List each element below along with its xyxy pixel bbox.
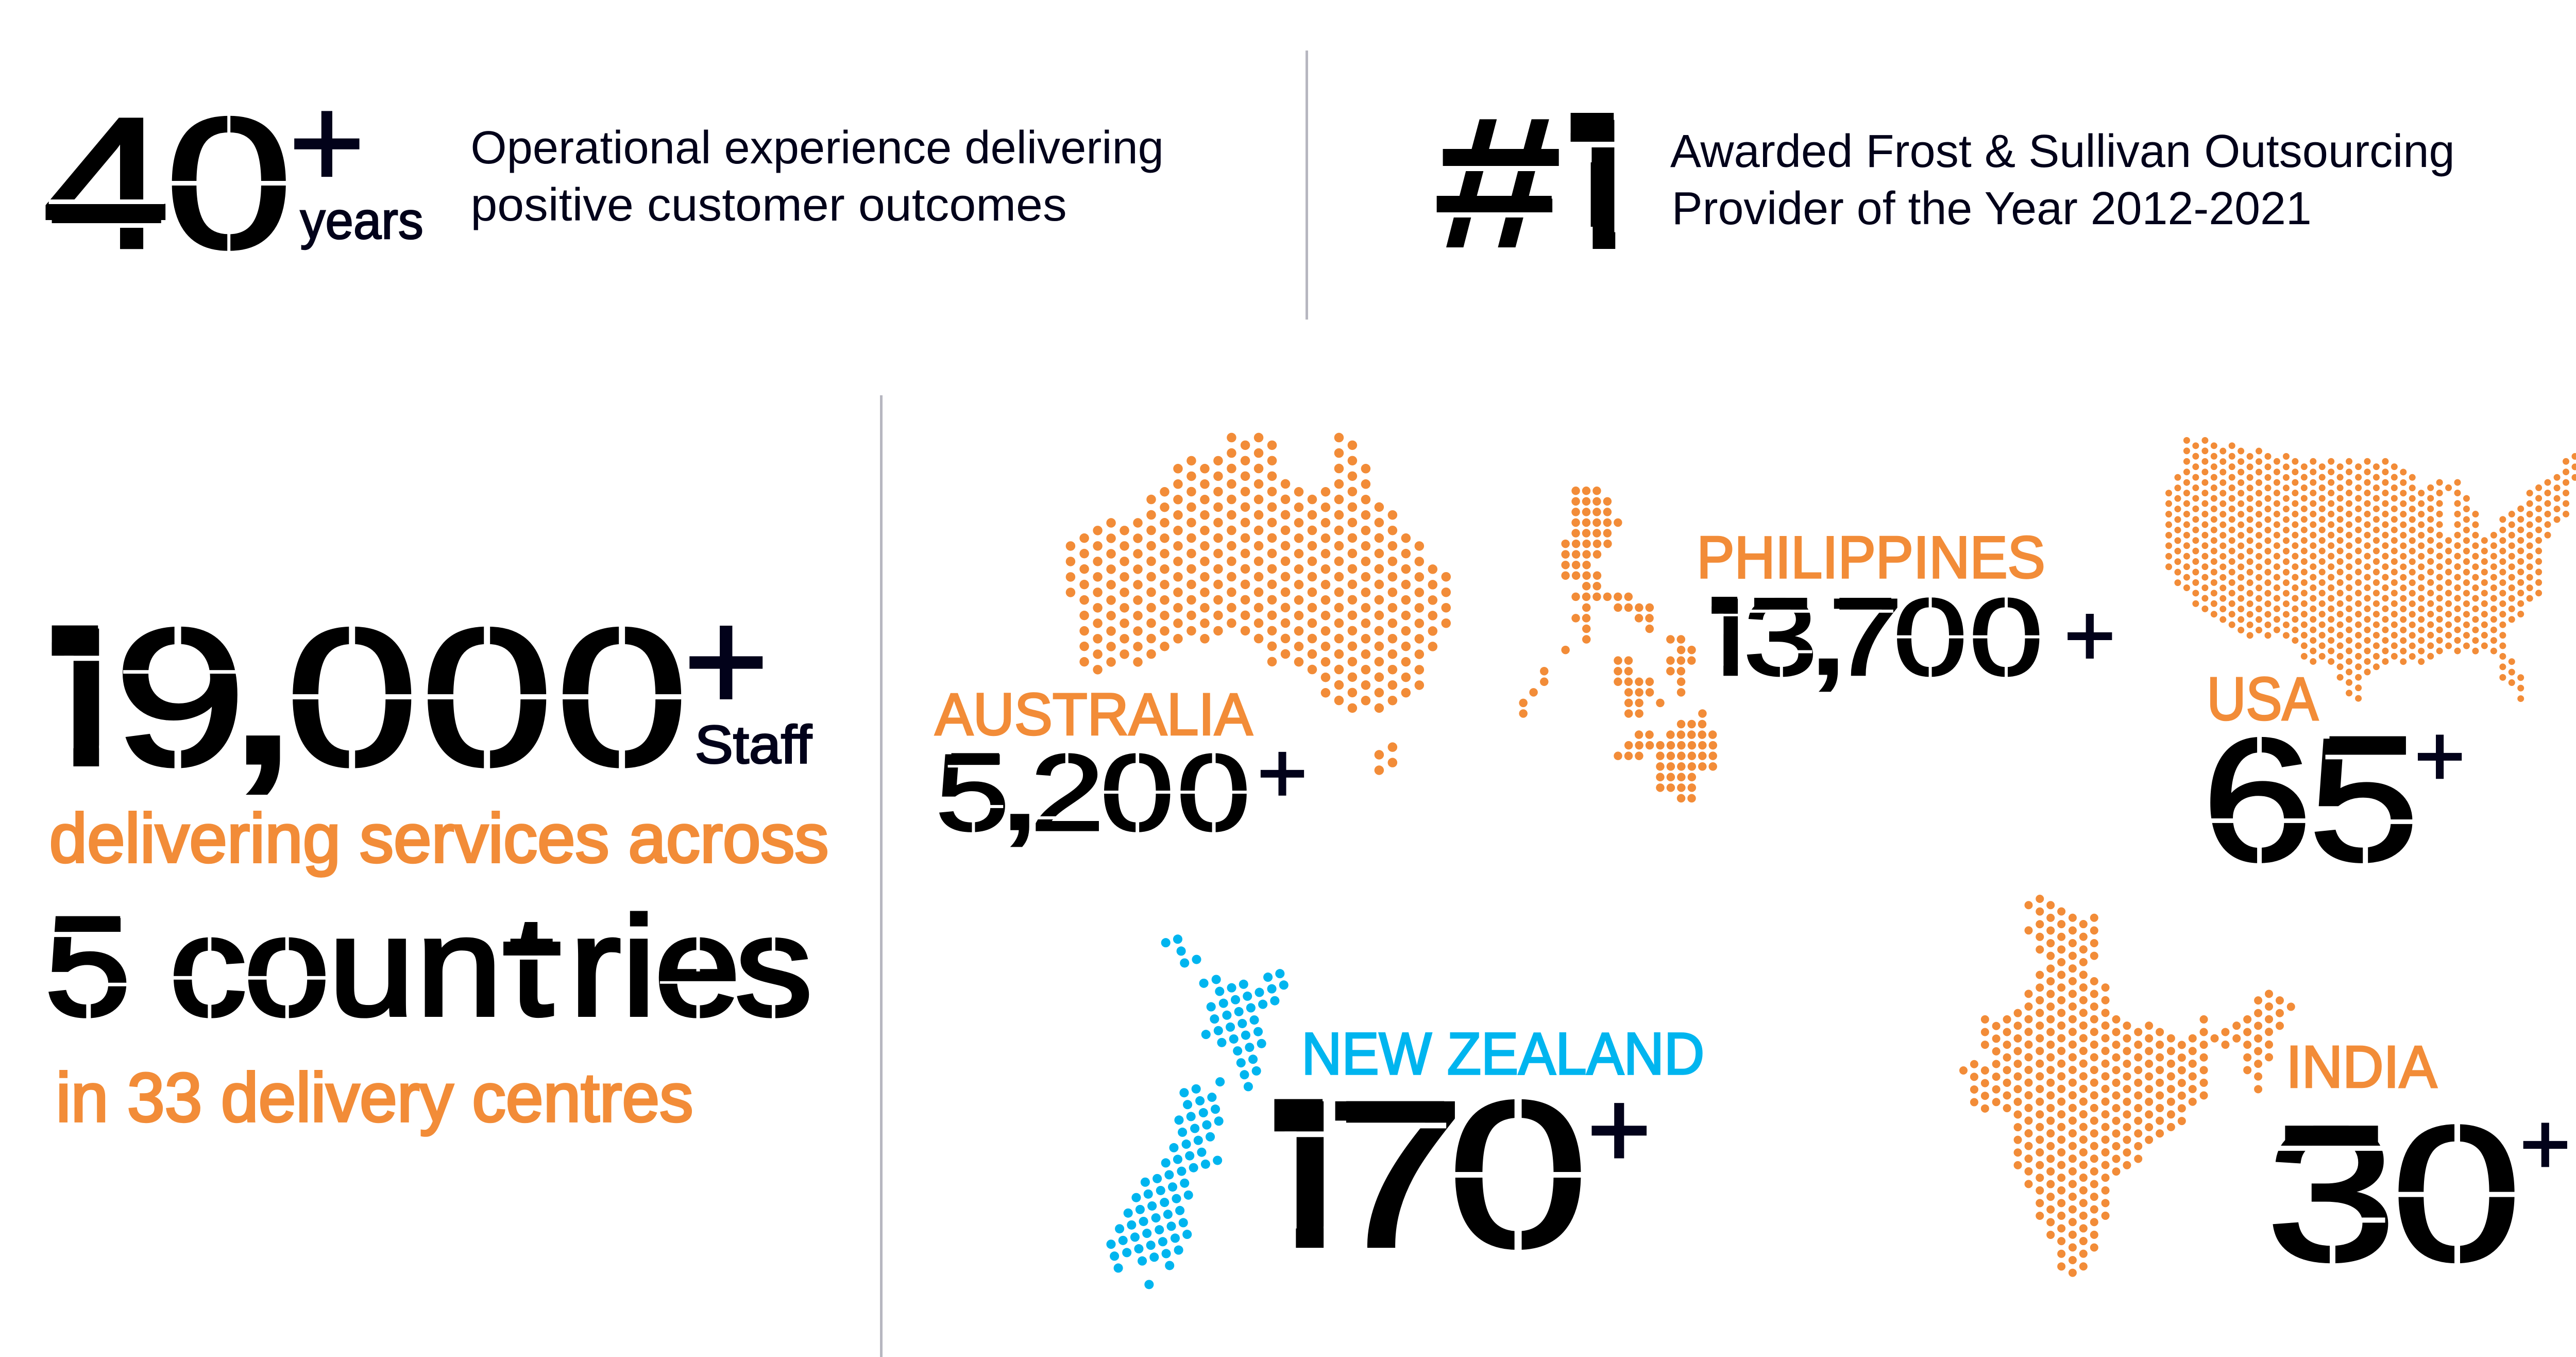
stat: 5,200 [935, 732, 1250, 853]
panel: India [1963, 899, 2571, 1300]
stat: 5,200: 5 [935, 732, 1009, 853]
description: operational experience [470, 122, 1164, 231]
panel: Australia [935, 438, 1446, 853]
stat: 65: 65 [2202, 702, 2419, 897]
panel: New Zealand [1111, 939, 1704, 1291]
plus sign: + [2414, 707, 2465, 805]
stat: 19,000: 9 [114, 588, 246, 806]
plus sign: + [2064, 586, 2115, 684]
stat: 19,000: 1 [15, 588, 148, 806]
panel: 40+ years experience [42, 69, 1164, 287]
label: PHILIPPINES: PHILIPPINES [1697, 524, 2045, 591]
label: AUSTRALIA: AUSTRALIA [935, 681, 1252, 747]
text: in 33 delivery centres: in 33 delivery centres [56, 1059, 693, 1136]
stat: #1: # [1434, 78, 1562, 288]
stat: 19,000 [15, 588, 688, 806]
stat: 170: 1 [1235, 1059, 1376, 1291]
description: operational experience: Operational experience delivering [470, 122, 1164, 174]
stat: 13,700: 3 [1743, 576, 1818, 698]
stat: #1 [1432, 78, 1667, 288]
map: Australia dots [1071, 438, 1446, 770]
label: INDIA: INDIA [2286, 1033, 2437, 1100]
label: years: years [300, 191, 423, 250]
stat: 13,700 [1691, 576, 2043, 698]
map: New Zealand dots [1111, 939, 1284, 1284]
label: Staff: Staff [695, 714, 812, 774]
panel: global headline [15, 579, 829, 1136]
stat: 13,700: , [1809, 576, 1847, 698]
panel: Philippines [1523, 491, 2115, 798]
stat: #1: 1 [1536, 82, 1661, 287]
panel: #1 award [1432, 78, 2455, 288]
description: Frost & Sullivan award: Awarded Frost & Sullivan Outsourcing [1670, 126, 2455, 177]
panel: USA [2169, 440, 2576, 897]
stat: 40: 40 [42, 79, 293, 287]
stat: 13,700: 700 [1828, 576, 2043, 698]
map: India dots [1963, 899, 2291, 1274]
plus sign: + [1587, 1068, 1651, 1190]
description: operational experience: positive customer outcomes [470, 179, 1067, 231]
label: USA: USA [2207, 665, 2318, 733]
map: Philippines dots [1523, 491, 1713, 798]
stat: 19,000: 000 [285, 588, 688, 806]
stat: 13,700: 1 [1691, 576, 1766, 698]
text: delivering services across: delivering services across [49, 800, 829, 877]
stat: 5,200: , [1001, 732, 1038, 853]
plus sign: + [1257, 725, 1308, 821]
divider: main [880, 395, 883, 1357]
divider: top [1306, 51, 1308, 320]
plus sign: + [289, 69, 365, 215]
label: NEW ZEALAND: NEW ZEALAND [1301, 1020, 1704, 1087]
description: Frost & Sullivan award: Provider of the Year 2012-2021 [1672, 183, 2312, 234]
stat: 5,200: 200 [1030, 732, 1250, 853]
plus sign: + [683, 579, 769, 743]
stat: 30: 30 [2266, 1086, 2521, 1300]
stat: 170: 70 [1325, 1059, 1588, 1291]
description: Frost & Sullivan award [1670, 126, 2455, 234]
stat: 19,000: , [230, 588, 296, 806]
plus sign: + [2520, 1095, 2571, 1193]
map: USA dots [2169, 440, 2576, 699]
stat: 5 countries: 5countries [45, 887, 812, 1045]
